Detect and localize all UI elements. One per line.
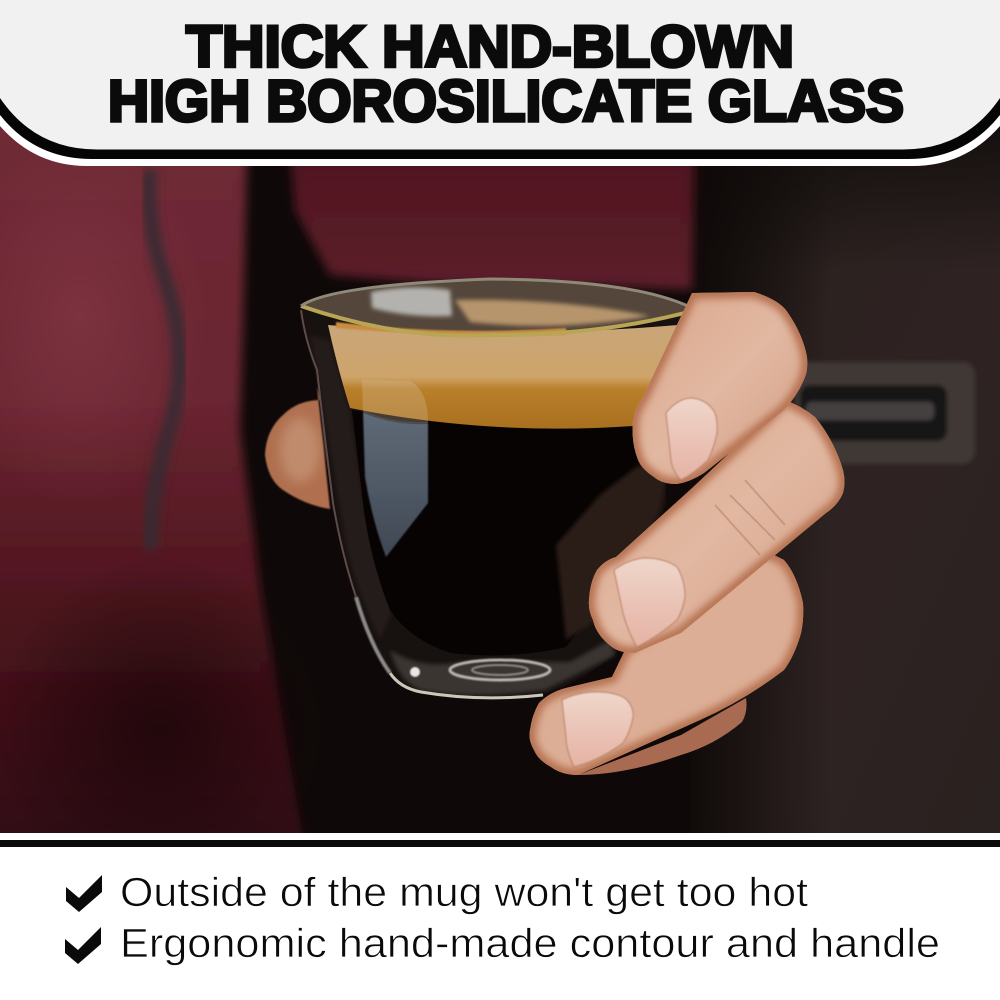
crema — [328, 325, 678, 429]
sweater sleeve — [290, 150, 695, 290]
footer rules — [0, 833, 1000, 1000]
hand fingers — [530, 292, 844, 775]
rim opening — [301, 279, 696, 335]
back crema seen through rim — [455, 300, 650, 326]
header banner — [0, 0, 1000, 166]
glass wall lines — [301, 310, 356, 597]
machine label — [795, 362, 975, 464]
finger reflection — [556, 465, 665, 640]
glass body — [301, 278, 696, 698]
title: THICK HAND-BLOWN — [186, 14, 794, 79]
nail — [666, 398, 717, 480]
rim line — [301, 306, 696, 336]
benefit 2: Ergonomic hand-made contour and handle — [120, 920, 940, 966]
coffee — [352, 410, 640, 655]
middle finger — [588, 402, 844, 653]
glass reflection on coffee — [363, 412, 428, 557]
benefit 1: Outside of the mug won't get too hot — [120, 869, 809, 915]
left wall tint — [310, 335, 392, 640]
sweater torso — [0, 100, 330, 900]
nail — [614, 558, 685, 647]
glass of espresso — [301, 278, 696, 698]
hand behind the glass: thumb — [265, 387, 330, 509]
index finger — [632, 292, 808, 484]
little finger — [578, 698, 746, 775]
orange band under rim — [336, 322, 566, 336]
title: HIGH BOROSILICATE GLASS — [108, 69, 904, 134]
knuckle creases — [715, 480, 785, 555]
glass base — [356, 597, 615, 698]
background photo — [0, 100, 1000, 900]
rim glare — [371, 287, 452, 316]
glass reflection on crema — [362, 380, 428, 423]
benefits list — [65, 869, 940, 966]
blurred espresso machine backdrop — [680, 100, 1000, 834]
title — [108, 14, 904, 134]
nail — [562, 692, 633, 767]
ring finger — [530, 556, 804, 775]
zipper seam — [149, 170, 180, 550]
